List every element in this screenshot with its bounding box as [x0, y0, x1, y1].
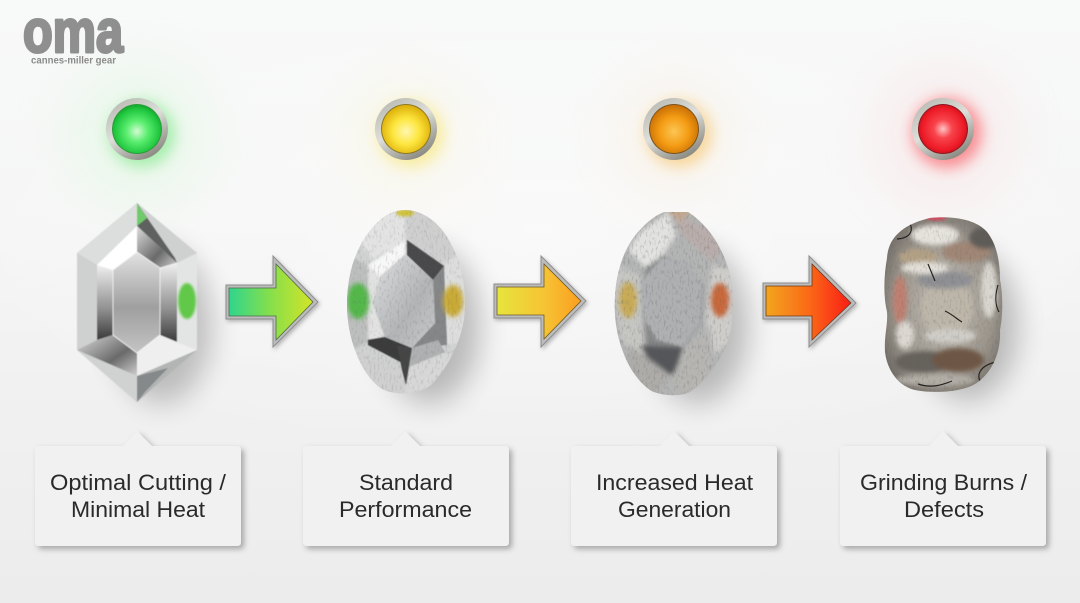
card: Standard Performance: [303, 431, 509, 546]
stage 2 indicator light: yellow: [375, 98, 444, 167]
card label: Optimal Cutting /: [50, 470, 227, 495]
card label: [860, 470, 1028, 522]
card label: Generation: [618, 497, 731, 522]
arrow 2: yellow to orange: [494, 256, 586, 347]
stage 3 indicator light: orange: [643, 98, 712, 167]
card label: Grinding Burns /: [860, 470, 1028, 495]
logo wordmark: oma: [23, 0, 124, 65]
logo: cannes-miller gear: [23, 0, 124, 66]
card: Increased Heat Generation: [571, 431, 777, 546]
card label: Performance: [339, 497, 472, 522]
gem 3: heavily worn grain: [610, 205, 748, 403]
arrow 3: orange to red: [763, 256, 856, 347]
card label: Defects: [904, 497, 984, 522]
card label: [596, 470, 753, 522]
card: Grinding Burns / Defects: [840, 431, 1046, 546]
card label: Increased Heat: [596, 470, 753, 495]
arrow 1: green to lime: [226, 256, 318, 347]
stage 4 indicator light: red: [912, 98, 982, 168]
stage 1 indicator light: green: [106, 98, 175, 167]
card label: [50, 470, 227, 522]
card label: [339, 470, 472, 522]
gem 2: slightly worn grain: [340, 205, 480, 403]
card label: Standard: [359, 470, 453, 495]
card: Optimal Cutting / Minimal Heat: [35, 431, 241, 546]
gem 4: burned deformed grain: [880, 210, 1018, 400]
card label: Minimal Heat: [71, 497, 205, 522]
logo tagline: cannes-miller gear: [31, 54, 116, 66]
gem 1: sharp crystal grain: [77, 203, 212, 403]
